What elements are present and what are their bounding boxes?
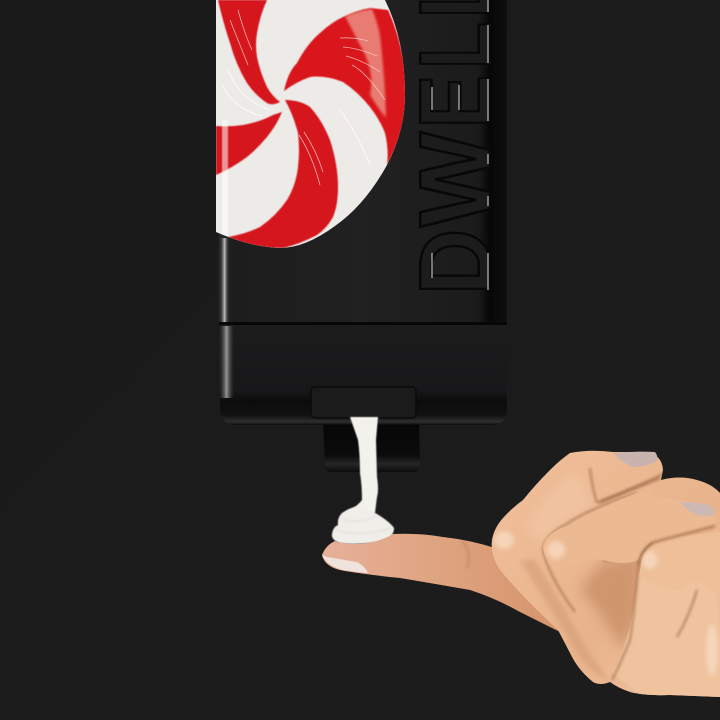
- embossed brand name DWELL: L: [400, 22, 512, 69]
- cream dollop: [332, 506, 394, 544]
- knuckle highlights: [494, 531, 718, 676]
- palm and fingers: [492, 451, 720, 697]
- hand: [322, 451, 720, 700]
- embossed brand name DWELL: W: [400, 131, 512, 227]
- fist: [492, 451, 720, 700]
- finger crease: [462, 541, 469, 568]
- cap seam: [219, 322, 507, 325]
- shadow between fingers: [580, 552, 640, 650]
- red band top left: [218, 0, 280, 104]
- embossed brand name DWELL: [400, 0, 512, 295]
- embossed brand name DWELL: E: [400, 75, 512, 128]
- embossed brand name DWELL: D: [400, 229, 512, 295]
- dispenser flap: [323, 417, 420, 472]
- left edge highlights: [219, 238, 234, 398]
- shadow under second finger: [638, 526, 715, 565]
- cream shading: [336, 516, 392, 534]
- candy fine streaks: [230, 10, 385, 185]
- candy left gloss: [222, 120, 228, 235]
- second finger: [543, 493, 653, 564]
- pointing finger: [322, 534, 560, 632]
- red band left: [216, 112, 282, 175]
- product tube: [219, 0, 512, 425]
- back of hand: [612, 570, 720, 697]
- nail on top finger: [613, 452, 657, 467]
- peach glaze on red band: [345, 9, 386, 118]
- fingernail: [322, 555, 368, 573]
- tube body: [219, 0, 507, 324]
- back of first segment shading: [534, 481, 588, 536]
- red band bottom: [228, 100, 338, 248]
- product photo scene: [216, 0, 720, 697]
- candy white streaks: [222, 70, 370, 165]
- third finger: [640, 532, 720, 570]
- shadow under top finger: [600, 478, 660, 502]
- red band top right: [284, 8, 406, 165]
- cream: [332, 417, 394, 544]
- dispenser tab: [311, 387, 416, 418]
- soft crease shadows: [543, 468, 697, 680]
- lower finger shadow: [522, 560, 605, 678]
- cream strand: [342, 417, 378, 514]
- peppermint candy swirl: [216, 0, 411, 250]
- candy white base: [216, 0, 411, 250]
- nail on second finger: [680, 502, 714, 516]
- tube cap: [220, 325, 507, 425]
